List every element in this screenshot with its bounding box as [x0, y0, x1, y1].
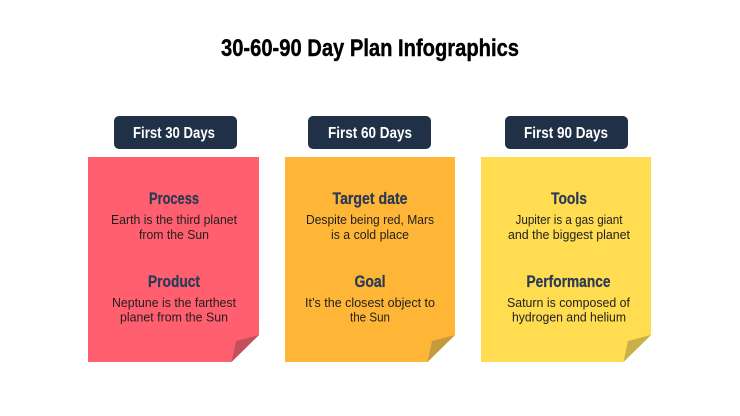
text: performance description: Saturn is composed of — [507, 296, 631, 310]
text: process description: from the Sun — [139, 228, 209, 242]
text: goal description — [305, 296, 435, 324]
heading: process: Process — [149, 189, 199, 208]
text: product description — [112, 296, 237, 324]
label pill: first 90 days: First 90 Days — [524, 125, 608, 142]
sticky note: red — [88, 157, 259, 362]
text: process description — [111, 213, 238, 242]
label pill: first 60 days: First 60 Days — [328, 125, 412, 142]
label pill: first 60 days — [308, 116, 431, 149]
label pill: first 90 days — [505, 116, 628, 149]
text: process description: Earth is the third planet — [111, 213, 238, 227]
panel: first 60 days — [285, 116, 455, 362]
title: 30-60-90 Day Plan Infographics — [221, 35, 519, 62]
text: performance description: hydrogen and helium — [512, 310, 626, 324]
heading: goal: Goal — [354, 272, 386, 291]
text: performance description — [507, 296, 631, 324]
panel: first 90 days — [481, 116, 651, 362]
text: target date description: is a cold place — [331, 228, 409, 242]
text: tools description: and the biggest planet — [508, 228, 631, 242]
icon: folded corner red — [232, 335, 259, 362]
heading: product: Product — [148, 272, 200, 291]
text: product description: Neptune is the farthest — [112, 296, 237, 310]
heading: target date: Target date — [332, 189, 408, 208]
label pill: first 30 days — [114, 116, 237, 149]
text: tools description — [508, 213, 631, 242]
sticky note: yellow — [481, 157, 651, 362]
icon: folded corner orange — [428, 335, 455, 362]
text: goal description: It’s the closest object to — [305, 296, 435, 310]
panel: first 30 days — [88, 116, 259, 362]
text: target date description: Despite being red, Mars — [306, 213, 434, 227]
text: tools description: Jupiter is a gas giant — [516, 213, 623, 227]
heading: performance: Performance — [526, 272, 610, 291]
label pill: first 30 days: First 30 Days — [133, 125, 215, 142]
text: goal description: the Sun — [350, 310, 390, 324]
text: product description: planet from the Sun — [120, 310, 228, 324]
text: target date description — [306, 213, 434, 242]
heading: tools: Tools — [551, 189, 587, 208]
sticky note: orange — [285, 157, 455, 362]
icon: folded corner yellow — [624, 335, 651, 362]
